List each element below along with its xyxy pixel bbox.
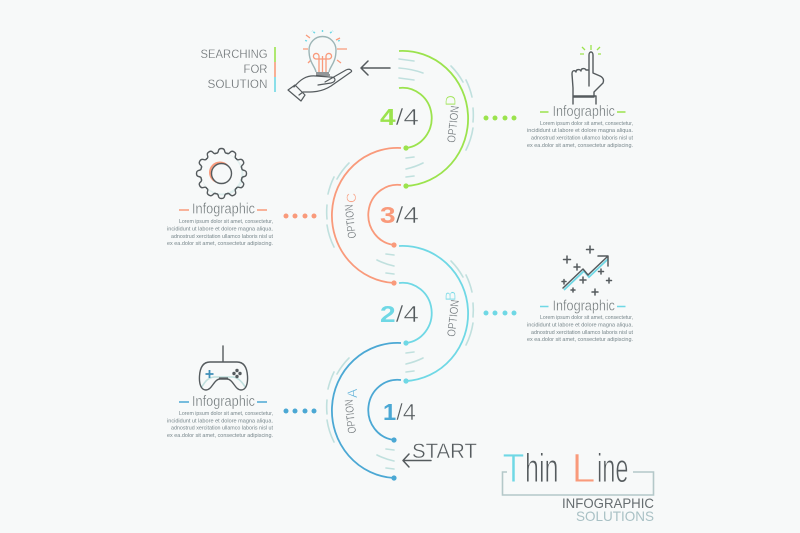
lorem text: adnostrud xercitation ullamco laboris nisl ut xyxy=(531,330,633,336)
option D label: OPTION xyxy=(446,105,462,143)
top decorative ticks: option D xyxy=(399,59,423,80)
curve: option B (cyan) xyxy=(399,246,473,384)
panel: option C xyxy=(167,148,273,247)
bulb rays xyxy=(304,30,341,41)
lorem text: adnostrud xercitation ullamco laboris nisl ut xyxy=(531,136,633,142)
start arrow xyxy=(403,454,431,467)
lorem text: ex ea.dolor sit amet, consectetur adipiscing. xyxy=(167,241,273,247)
wordmark: ine xyxy=(597,445,628,491)
lorem text xyxy=(527,315,633,343)
filament xyxy=(313,53,332,72)
lorem text: ex ea.dolor sit amet, consectetur adipiscing. xyxy=(167,433,273,439)
option A label: A xyxy=(344,388,360,398)
lorem text xyxy=(167,219,273,247)
lorem text: incididunt ut labore et dolore magna aliqua. xyxy=(167,226,273,232)
heading: Infographic xyxy=(192,394,255,410)
logo: thin line: SOLUTIONS xyxy=(576,508,654,524)
heading: Infographic xyxy=(552,104,615,120)
wordmark: hin xyxy=(525,445,558,491)
bracket xyxy=(502,472,654,495)
lorem text: incididunt ut labore et dolore magna aliqua. xyxy=(527,128,633,134)
option C label: OPTION xyxy=(343,204,359,239)
wordmark xyxy=(502,445,628,491)
dots: option C connector xyxy=(284,214,316,218)
arrow pointing to solution xyxy=(361,61,390,75)
tricolour bar xyxy=(274,47,276,92)
lorem text: adnostrud xercitation ullamco laboris nisl ut xyxy=(171,234,273,240)
step number 3/4: 3/4 xyxy=(380,202,419,228)
lorem text xyxy=(527,121,633,149)
icon: game controller xyxy=(199,346,248,390)
option A label: OPTION xyxy=(343,399,359,434)
dots: option D connector xyxy=(484,116,516,120)
wordmark: L xyxy=(572,445,596,491)
curve: option C (orange) xyxy=(327,148,401,286)
lorem text: Lorem ipsum dolor sit amet, consectetur, xyxy=(179,219,273,225)
searching for solution heading: FOR xyxy=(244,62,268,76)
lorem text: Lorem ipsum dolor sit amet, consectetur, xyxy=(179,411,273,417)
option D label: D xyxy=(442,95,460,106)
heading: Infographic xyxy=(552,298,615,314)
lorem text: incididunt ut labore et dolore magna aliqua. xyxy=(527,322,633,328)
lorem text xyxy=(167,411,273,439)
option C label: C xyxy=(343,193,359,203)
dots: option A connector xyxy=(284,408,316,414)
searching for solution heading: SOLUTION xyxy=(208,77,268,91)
subtitle: INFOGRAPHIC xyxy=(562,495,654,511)
icon: growth arrow with stars xyxy=(562,246,612,295)
option B label: B xyxy=(442,291,460,301)
panel: option B xyxy=(527,246,633,343)
lorem text: adnostrud xercitation ullamco laboris nisl ut xyxy=(171,426,273,432)
searching for solution heading: SEARCHING xyxy=(200,47,268,61)
wordmark: T xyxy=(502,445,524,491)
lorem text: incididunt ut labore et dolore magna aliqua. xyxy=(167,418,273,424)
lorem text: ex ea.dolor sit amet, consectetur adipiscing. xyxy=(527,337,633,343)
lorem text: ex ea.dolor sit amet, consectetur adipiscing. xyxy=(527,143,633,149)
panel: option A xyxy=(167,346,273,439)
icon: light bulb on hand xyxy=(288,30,352,101)
option B label: OPTION xyxy=(446,299,462,337)
searching for solution heading xyxy=(200,47,268,91)
curve: option A (blue) xyxy=(327,343,401,481)
panel: option D xyxy=(527,45,633,149)
step number 2/4: 2/4 xyxy=(380,301,419,327)
curve: option D (green) xyxy=(399,51,473,189)
bulb glass xyxy=(309,36,336,72)
icon: pointing hand xyxy=(572,45,604,104)
hand xyxy=(288,69,352,101)
start label: START xyxy=(412,439,477,463)
step number 1/4: 1/4 xyxy=(383,399,416,425)
icon: gear xyxy=(196,148,246,198)
logo: thin line xyxy=(502,445,654,524)
heading: Infographic xyxy=(192,202,255,218)
lorem text: Lorem ipsum dolor sit amet, consectetur, xyxy=(540,121,633,127)
step number 4/4: 4/4 xyxy=(380,104,419,130)
lorem text: Lorem ipsum dolor sit amet, consectetur, xyxy=(540,315,633,321)
dots: option B connector xyxy=(484,310,516,316)
